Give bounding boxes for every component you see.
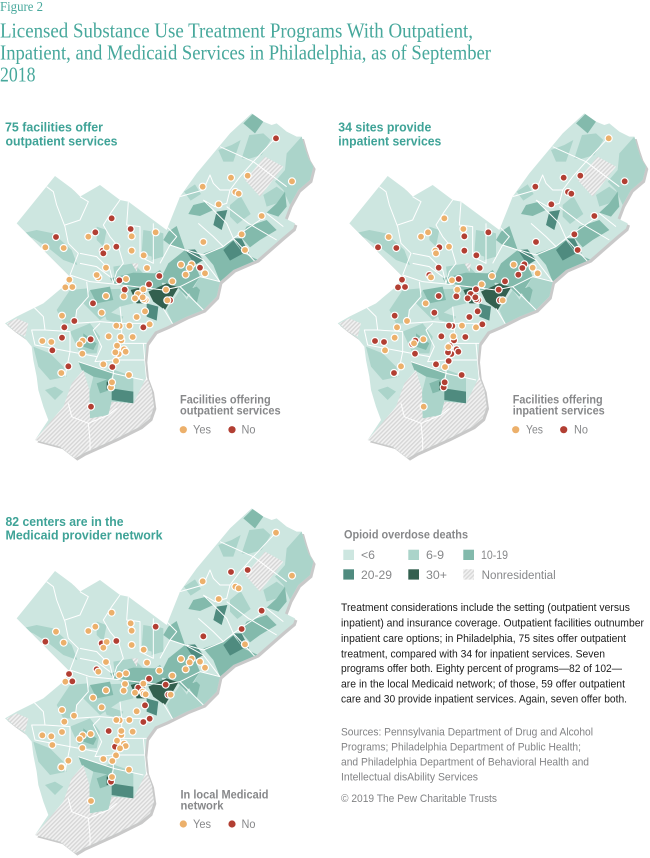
body text: programs offer both. Eighty percent of programs—82 of 102— [341, 663, 622, 675]
legend: outpatient: outpatient services [180, 405, 281, 417]
title: Inpatient, and Medicaid Services in Philadelphia, as of September [0, 40, 491, 64]
map: outpatient base [0, 107, 320, 463]
sources: Intellectual disAbility Services [341, 772, 479, 784]
legend: Medicaid: In local Medicaid [180, 789, 268, 801]
legend: Medicaid: Yes [193, 819, 211, 831]
heading: inpatient: inpatient services [338, 135, 441, 149]
body text: treatment, compared with 34 for inpatient services. Seven [341, 648, 605, 660]
sources: Sources: Pennsylvania Department of Drug and Alcohol [341, 727, 593, 739]
heading: Medicaid [6, 515, 163, 542]
title [0, 18, 491, 86]
legend: opioid overdose deaths: 30+ [426, 570, 447, 582]
heading: inpatient: 34 sites provide [338, 121, 431, 135]
body text: care and 30 provide inpatient services. Again, seven offer both. [341, 694, 627, 706]
legend: Medicaid [180, 789, 268, 831]
legend: outpatient: Yes [193, 425, 211, 437]
legend: opioid overdose deaths: <6 [361, 550, 375, 562]
figure label: Figure 2 [0, 0, 43, 15]
body text: are in the local Medicaid network; of those, 59 offer outpatient [341, 678, 625, 690]
legend: opioid overdose deaths: 20-29 [361, 570, 392, 582]
heading: Medicaid: Medicaid provider network [6, 528, 163, 542]
panel: Medicaid map [0, 502, 320, 858]
legend: outpatient: No [242, 425, 256, 437]
panel: outpatient map [0, 107, 320, 463]
legend: outpatient [180, 394, 281, 437]
legend: opioid overdose deaths: Nonresidential [482, 570, 556, 582]
legend: opioid overdose deaths [343, 529, 556, 582]
facility dots: inpatient [372, 135, 628, 410]
body text [341, 602, 644, 706]
legend: Medicaid: No [242, 819, 256, 831]
legend: opioid overdose deaths: 10-19 [481, 550, 508, 562]
body text: Treatment considerations include the setting (outpatient versus [341, 602, 631, 614]
heading: outpatient: outpatient services [6, 135, 118, 149]
legend: opioid overdose deaths: Opioid overdose deaths [344, 529, 468, 541]
legend: inpatient: inpatient services [513, 405, 605, 417]
sources: and Philadelphia Department of Behavioral Health and [341, 757, 589, 769]
legend: opioid overdose deaths: 6-9 [426, 550, 444, 562]
heading: inpatient [338, 121, 441, 149]
heading: outpatient [5, 121, 118, 149]
title: 2018 [0, 62, 36, 86]
sources: Programs; Philadelphia Department of Public Health; [341, 742, 581, 754]
legend: inpatient [512, 394, 605, 437]
copyright: © 2019 The Pew Charitable Trusts [341, 793, 498, 805]
legend: outpatient: Facilities offering [180, 394, 271, 406]
title: Licensed Substance Use Treatment Programs With Outpatient, [0, 18, 473, 42]
facility dots: Medicaid [39, 529, 295, 804]
legend: Medicaid: network [180, 800, 224, 812]
legend: inpatient: No [574, 425, 588, 437]
sources [341, 727, 593, 784]
body text: inpatient) and insurance coverage. Outpatient facilities outnumber [341, 618, 644, 630]
body text: inpatient care options; in Philadelphia, 75 sites offer outpatient [341, 633, 626, 645]
map: Medicaid base [0, 502, 320, 858]
facility dots: outpatient [39, 135, 295, 410]
heading: outpatient: 75 facilities offer [5, 121, 103, 135]
map: inpatient base [333, 107, 650, 463]
legend: inpatient: Facilities offering [513, 394, 603, 406]
heading: Medicaid: 82 centers are in the [6, 515, 124, 529]
panel: inpatient map [333, 107, 650, 463]
legend: inpatient: Yes [526, 425, 543, 437]
